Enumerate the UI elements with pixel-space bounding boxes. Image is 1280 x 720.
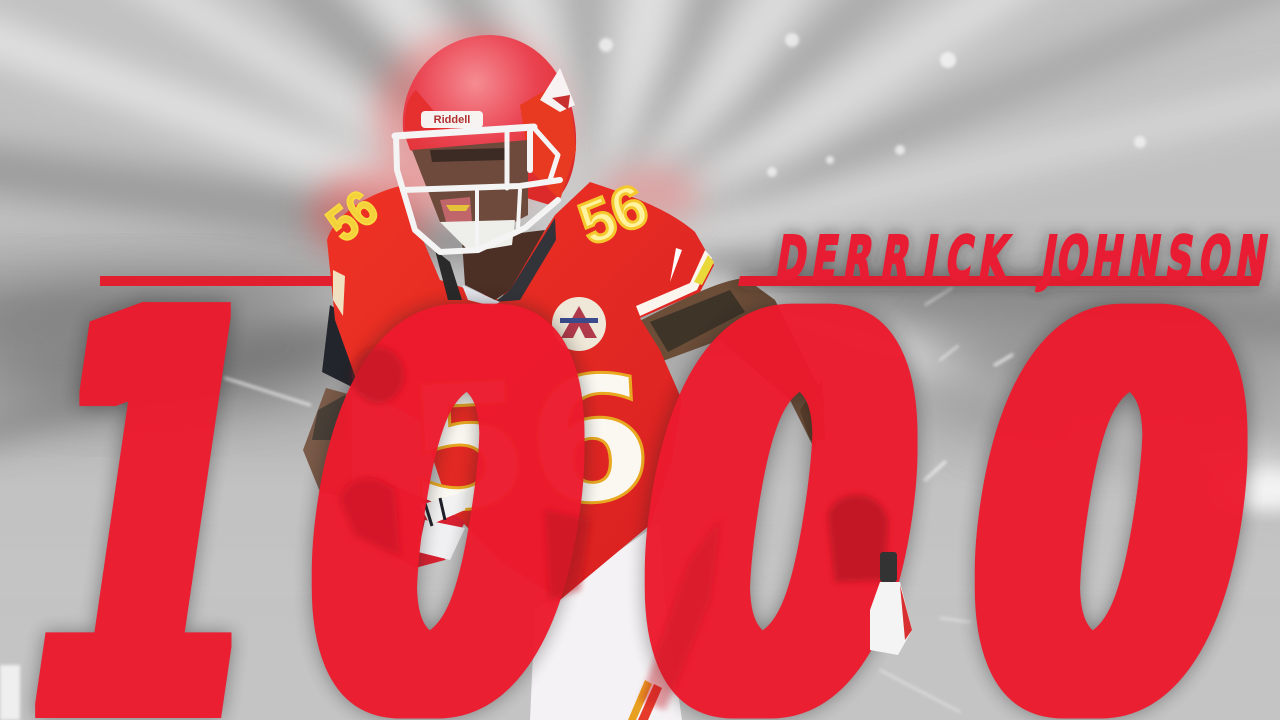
shoulder number left: 56 bbox=[316, 179, 388, 252]
giant number 1000 bbox=[0, 201, 1280, 720]
helmet bbox=[395, 35, 576, 252]
left glove bbox=[340, 477, 470, 568]
jersey bbox=[316, 171, 714, 600]
team patch bbox=[552, 297, 606, 351]
left arm with tattoo bbox=[303, 305, 385, 500]
Riddell nameplate bbox=[421, 111, 483, 128]
background: white sparks and streaks bbox=[225, 33, 1146, 712]
player photo illustration bbox=[303, 30, 825, 720]
white football pants bbox=[530, 522, 682, 720]
white face mask bbox=[395, 127, 560, 252]
right rule and player name bbox=[738, 224, 1272, 293]
player name: DERRICK JOHNSON bbox=[772, 224, 1272, 293]
shoulder number right: 56 bbox=[570, 171, 657, 258]
Riddell nameplate: Riddell bbox=[434, 114, 470, 126]
face bbox=[412, 140, 528, 235]
chest number: 56 bbox=[400, 338, 653, 551]
ghost details of the player showing through the digits bbox=[340, 347, 888, 710]
red glow around player bbox=[310, 30, 700, 260]
right glove bbox=[870, 552, 912, 655]
left rule bbox=[100, 276, 332, 286]
right arm with tattoo bbox=[638, 278, 825, 450]
